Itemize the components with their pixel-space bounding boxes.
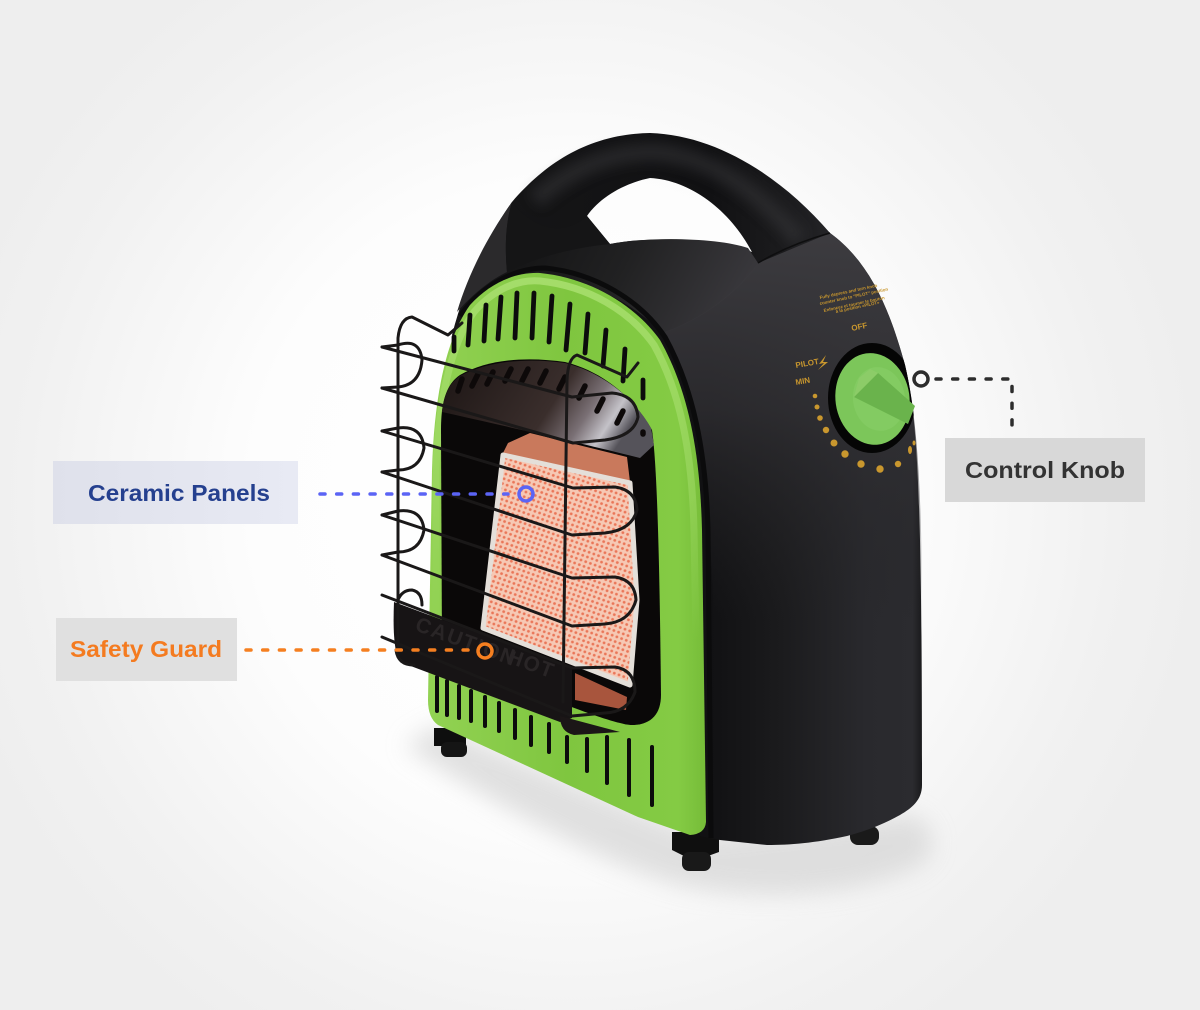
dial labels xyxy=(795,283,889,387)
handle left base xyxy=(506,202,610,272)
side panel shading xyxy=(662,233,922,620)
safety guard plate xyxy=(394,602,620,735)
safety guard label: Safety Guard xyxy=(70,636,222,662)
control knob leader line xyxy=(936,379,1012,426)
knob recess xyxy=(828,343,916,453)
ceramic panels marker xyxy=(519,487,533,501)
knob pointer facet xyxy=(854,369,878,397)
green rim highlight xyxy=(436,281,696,640)
dial labels: Enfoncez et tourner le bouton xyxy=(823,295,885,313)
knob disc xyxy=(829,348,916,450)
knob pointer xyxy=(854,373,915,424)
safety guard plate: HOT xyxy=(504,645,558,683)
callout: control knob xyxy=(914,372,1145,502)
black body with handle xyxy=(452,133,922,845)
handle seam xyxy=(758,233,830,263)
floor shadow xyxy=(405,725,933,895)
dial labels: Fully depress and turn knob xyxy=(819,283,878,300)
dial labels: OFF xyxy=(851,321,868,333)
control knob marker xyxy=(914,372,928,386)
safety guard leader line xyxy=(246,648,468,652)
control knob xyxy=(828,343,916,453)
heater illustration xyxy=(382,133,933,895)
top vent slots xyxy=(454,293,643,398)
ceramic panels label: Ceramic Panels xyxy=(88,480,270,506)
safety guard label box xyxy=(56,618,237,681)
heater window xyxy=(441,359,661,725)
callout: ceramic panels xyxy=(53,461,533,524)
feet xyxy=(434,728,879,871)
dial labels: MIN xyxy=(795,376,811,387)
bottom vent slots xyxy=(437,677,652,805)
reflector holes xyxy=(458,369,643,434)
panel base glow xyxy=(575,673,627,710)
dial dots xyxy=(813,394,916,473)
callout: safety guard xyxy=(56,618,492,681)
dial labels: PILOT xyxy=(795,357,820,370)
safety guard marker xyxy=(478,644,492,658)
top reflector xyxy=(442,361,654,458)
ceramic panels leader line xyxy=(320,492,508,496)
infographic: portable heater with feature callouts xyxy=(53,88,1145,912)
knob inner disc xyxy=(849,364,909,434)
dial labels: counter knob to "PILOT" position xyxy=(819,287,889,306)
plate lettering: CAUTION xyxy=(412,613,520,671)
control knob label: Control Knob xyxy=(965,457,1125,483)
ceramic panel xyxy=(483,455,637,685)
heat glow above panel xyxy=(503,433,630,482)
left shell xyxy=(457,202,512,312)
wire guard xyxy=(382,317,638,716)
ceramic panels label box xyxy=(53,461,298,524)
handle sheen xyxy=(535,152,800,240)
dial labels: à la position «PILOT» xyxy=(835,300,880,314)
control knob label box xyxy=(945,438,1145,502)
green front panel xyxy=(428,273,706,835)
green panel black bezel xyxy=(460,268,711,838)
top shoulder panel xyxy=(507,239,758,333)
